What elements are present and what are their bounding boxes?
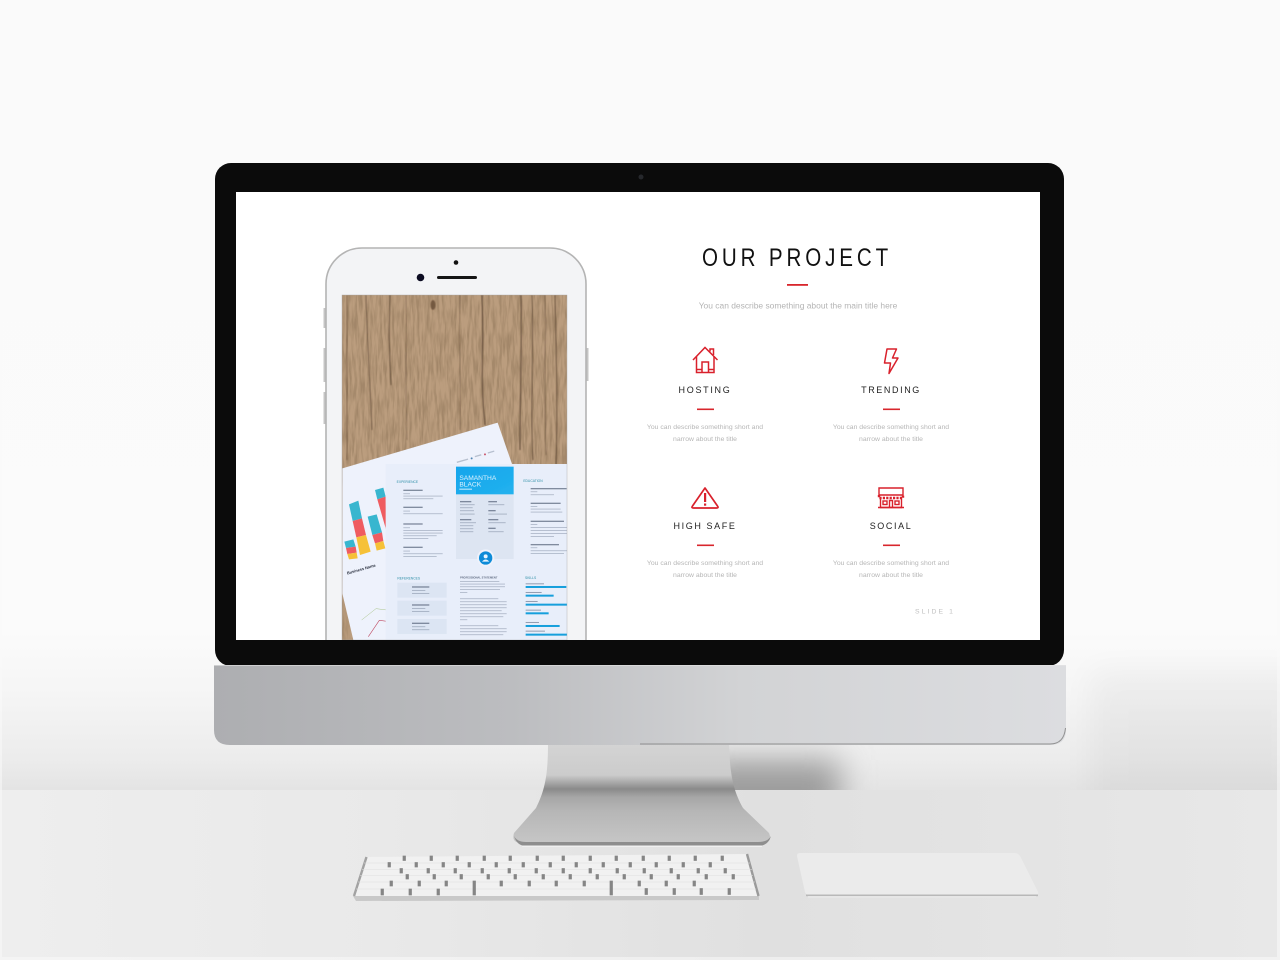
resume name header: SAMANTHA	[459, 475, 497, 482]
monitor	[214, 163, 1066, 745]
stand shadow on wall	[729, 745, 858, 790]
feature: social: narrow about the title	[859, 572, 923, 579]
references column	[397, 576, 447, 634]
description: You can describe something short and	[647, 424, 763, 431]
trackpad	[797, 853, 1038, 898]
heading: SOCIAL	[870, 521, 912, 531]
professional statement	[460, 575, 507, 635]
icon: warning triangle	[692, 488, 718, 508]
references column: REFERENCES	[397, 576, 421, 580]
skills bars	[525, 576, 569, 636]
professional statement: PROFESSIONAL STATEMENT	[460, 575, 498, 579]
phone speaker	[437, 276, 477, 279]
chart legend	[457, 450, 494, 463]
heading: HIGH SAFE	[674, 521, 736, 531]
icon: lightning bolt	[884, 349, 898, 374]
icon: storefront	[878, 488, 904, 508]
education column	[523, 479, 568, 554]
phone body	[325, 247, 587, 640]
resume name header: BLACK	[459, 481, 482, 488]
experience column: EXPERIENCE	[397, 480, 419, 484]
skills bars: SKILLS	[525, 576, 537, 580]
icon: house	[693, 348, 718, 372]
feature: high safe	[647, 488, 763, 579]
front resume paper	[386, 464, 572, 644]
feature: social	[833, 488, 949, 579]
slide screen	[236, 192, 1040, 640]
monitor chin	[214, 665, 1066, 745]
phone camera	[417, 274, 424, 281]
keyboard	[353, 854, 759, 901]
monitor stand	[513, 743, 771, 847]
back paper	[342, 422, 512, 640]
feature: hosting: narrow about the title	[673, 436, 737, 443]
resume side panel	[456, 494, 514, 559]
experience column	[397, 480, 443, 557]
slide number: SLIDE 1	[915, 608, 955, 616]
education column: EDUCATION	[523, 479, 543, 483]
resume name header	[456, 467, 514, 494]
heading: TRENDING	[861, 385, 921, 395]
chart title: Business Name	[346, 562, 377, 576]
phone screen photo	[342, 295, 573, 644]
desk surface	[0, 790, 1280, 960]
resume details	[460, 501, 507, 532]
monitor bezel	[215, 163, 1064, 666]
feature: hosting	[647, 348, 763, 443]
feature: high safe: narrow about the title	[673, 572, 737, 579]
subtitle: You can describe something about the main title here	[699, 300, 898, 310]
phone sensor	[454, 260, 458, 265]
resume and chart paper scene	[342, 423, 573, 644]
webcam	[638, 174, 644, 180]
title underline	[787, 284, 808, 286]
description: You can describe something short and	[833, 424, 949, 431]
title: OUR PROJECT	[702, 244, 892, 272]
wood texture	[342, 295, 567, 640]
description: You can describe something short and	[647, 560, 763, 567]
heading: HOSTING	[679, 385, 731, 395]
feature: trending: narrow about the title	[859, 436, 923, 443]
description: You can describe something short and	[833, 560, 949, 567]
phone mockup	[324, 247, 588, 640]
stacked bar chart	[344, 488, 387, 559]
profile badge	[477, 549, 494, 567]
keyboard key gaps	[381, 856, 734, 895]
feature: trending	[833, 349, 949, 443]
line chart	[362, 609, 387, 637]
phone side buttons	[324, 308, 588, 424]
